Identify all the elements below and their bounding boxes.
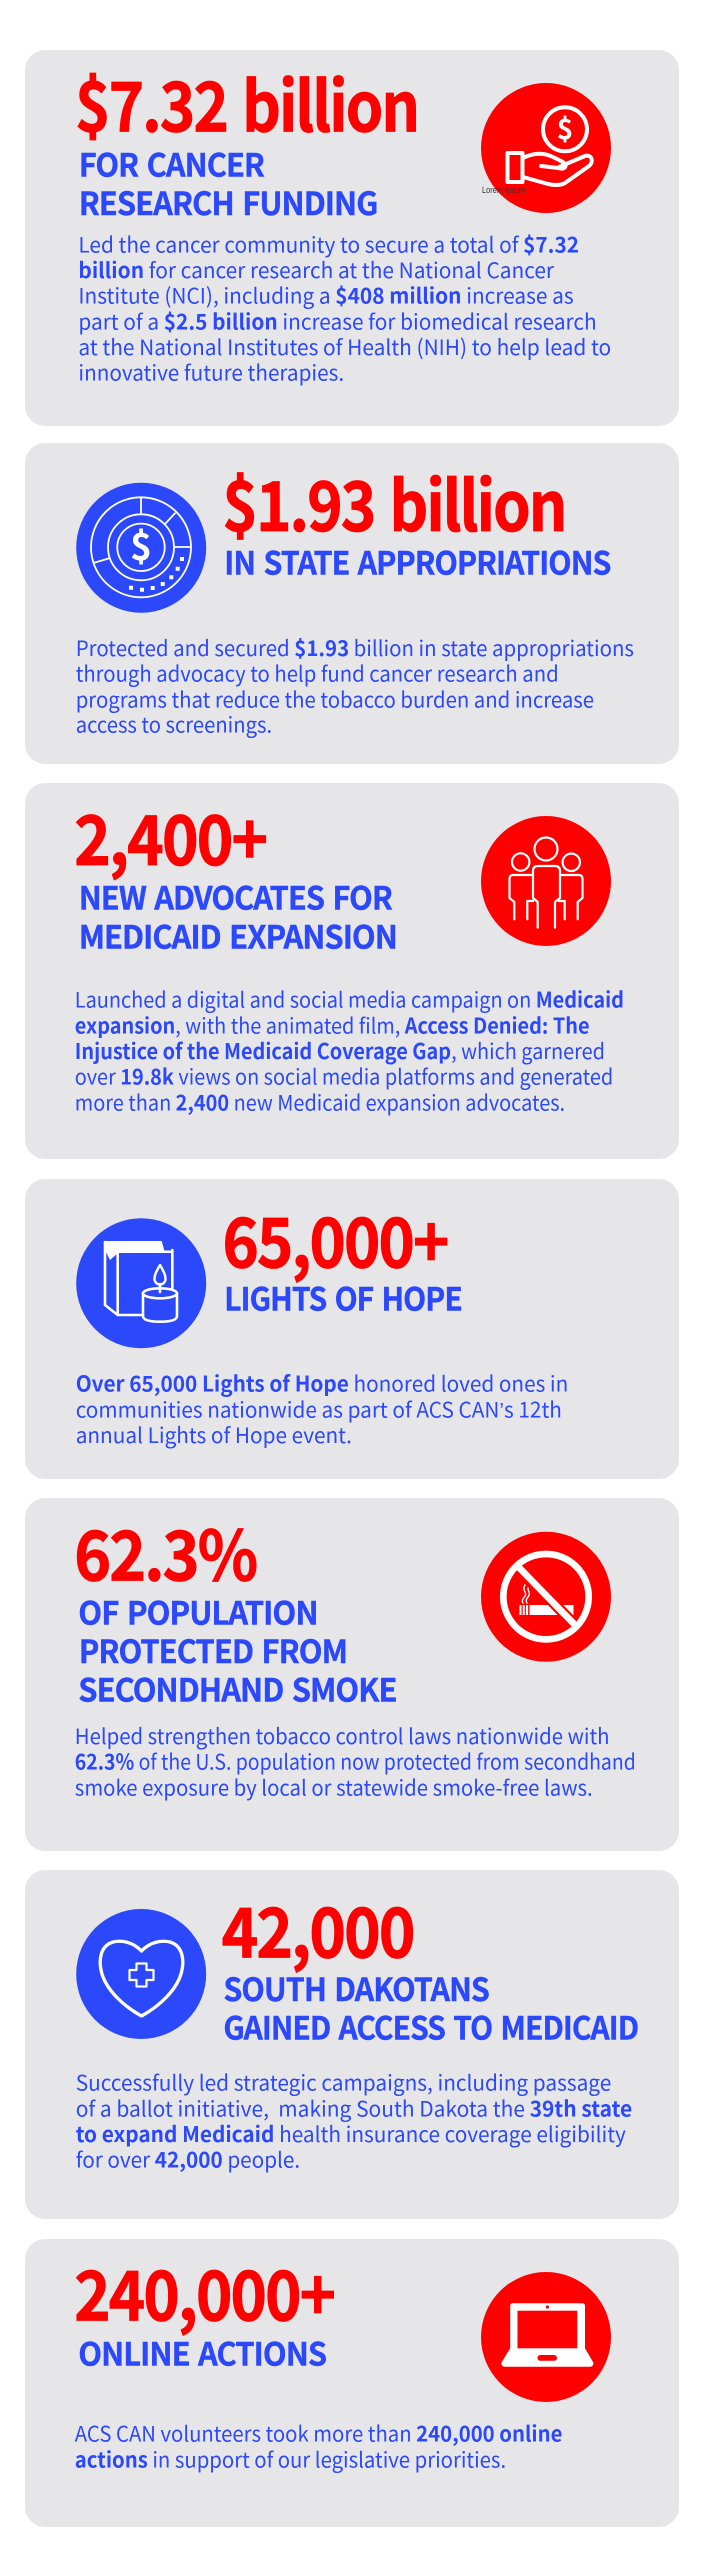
subheading: South Dakotans gained access to Medicaid <box>223 1965 638 2050</box>
body text <box>76 632 634 740</box>
panel: protected from secondhand smoke <box>25 1498 679 1851</box>
body text: expansion, with the animated film, Access Denied: The <box>75 1009 590 1040</box>
icon: group of people <box>481 816 611 946</box>
panel: cancer research funding <box>25 50 679 426</box>
subheading: for cancer research funding: FOR CANCER <box>79 141 265 187</box>
subheading: new advocates for Medicaid expansion: MEDICAID EXPANSION <box>79 912 397 958</box>
body text: smoke exposure by local or statewide smoke-free laws. <box>75 1771 593 1802</box>
heading: 42,000: 42,000 <box>222 1877 414 1977</box>
panel: new advocates for Medicaid expansion <box>25 783 679 1159</box>
subheading: of population protected from secondhand smoke: SECONDHAND SMOKE <box>78 1666 397 1712</box>
body text: billion for cancer research at the National Cancer <box>78 254 555 285</box>
body text <box>75 1720 636 1802</box>
body text: Helped strengthen tobacco control laws nationwide with <box>75 1720 610 1751</box>
subheading: of population protected from secondhand smoke <box>78 1589 397 1712</box>
body text: of a ballot initiative, making South Dakota the 39th state <box>76 2092 632 2123</box>
body text <box>75 2418 562 2474</box>
body text <box>75 984 624 1117</box>
body text <box>78 228 611 388</box>
panel: online actions <box>25 2239 679 2527</box>
body text: part of a $2.5 billion increase for biomedical research <box>78 305 597 336</box>
icon: heart with cross <box>76 1909 206 2039</box>
body text: Protected and secured $1.93 billion in state appropriations <box>76 632 634 663</box>
body text: at the National Institutes of Health (NIH) to help lead to <box>78 331 611 362</box>
icon: hand holding coin <box>481 83 611 213</box>
body text: ACS CAN volunteers took more than 240,000 online <box>75 2418 562 2449</box>
body text: Over 65,000 Lights of Hope honored loved ones in <box>76 1368 568 1399</box>
body text: Injustice of the Medicaid Coverage Gap, which garnered <box>75 1035 605 1066</box>
body text: actions in support of our legislative priorities. <box>75 2443 506 2474</box>
body text: through advocacy to help fund cancer research and <box>76 658 559 689</box>
heading: 62.3%: 62.3% <box>74 1501 257 1601</box>
subheading: in state appropriations: IN STATE APPROPRIATIONS <box>224 538 611 584</box>
icon: no smoking <box>481 1532 611 1662</box>
body text: programs that reduce the tobacco burden and increase <box>76 683 594 714</box>
body text: Institute (NCI), including a $408 million increase as <box>78 280 574 311</box>
body text: Launched a digital and social media campaign on Medicaid <box>75 984 624 1015</box>
icon: hand holding coin: $ <box>557 108 573 148</box>
body text: for over 42,000 people. <box>76 2144 300 2175</box>
icon: laptop <box>481 2272 611 2402</box>
panel: state appropriations <box>25 443 679 764</box>
subheading: South Dakotans gained access to Medicaid: GAINED ACCESS TO MEDICAID <box>223 2004 638 2050</box>
heading: $1.93 billion: $1.93 billion <box>222 451 565 551</box>
subheading: new advocates for Medicaid expansion: NEW ADVOCATES FOR <box>79 873 393 919</box>
body text: innovative future therapies. <box>78 357 344 388</box>
heading: $7.32 billion: $7.32 billion <box>75 52 418 152</box>
subheading: South Dakotans gained access to Medicaid: SOUTH DAKOTANS <box>223 1965 489 2011</box>
panel: South Dakotans gained access to Medicaid <box>25 1870 679 2219</box>
body text: over 19.8k views on social media platforms and generated <box>75 1061 613 1092</box>
body text: communities nationwide as part of ACS CAN’s 12th <box>76 1393 562 1424</box>
subheading: lights of hope: LIGHTS OF HOPE <box>224 1274 462 1320</box>
icon: hand holding coin: Lorem Ipsum <box>482 185 525 195</box>
body text: more than 2,400 new Medicaid expansion advocates. <box>75 1086 565 1117</box>
heading: 65,000+: 65,000+ <box>222 1187 448 1287</box>
heading: 240,000+: 240,000+ <box>74 2241 335 2341</box>
body text: Successfully led strategic campaigns, including passage <box>76 2067 611 2098</box>
body text: Led the cancer community to secure a total of $7.32 <box>78 228 579 259</box>
subheading: of population protected from secondhand smoke: OF POPULATION <box>78 1589 318 1635</box>
subheading: of population protected from secondhand smoke: PROTECTED FROM <box>79 1627 347 1673</box>
subheading: for cancer research funding: RESEARCH FUNDING <box>79 179 377 225</box>
heading: 2,400+: 2,400+ <box>74 785 267 885</box>
subheading: new advocates for Medicaid expansion <box>79 873 397 958</box>
icon: dollar dial: $ <box>130 517 152 571</box>
icon: luminaria bag and candle <box>76 1218 206 1348</box>
subheading: online actions: ONLINE ACTIONS <box>78 2329 326 2375</box>
body text: 62.3% of the U.S. population now protected from secondhand <box>75 1746 636 1777</box>
body text: to expand Medicaid health insurance coverage eligibility <box>76 2118 626 2149</box>
icon: dollar dial <box>76 483 206 613</box>
body text: annual Lights of Hope event. <box>76 1419 352 1450</box>
body text <box>76 1368 568 1450</box>
body text <box>76 2067 632 2175</box>
subheading: for cancer research funding <box>79 141 377 225</box>
body text: access to screenings. <box>76 709 272 740</box>
panel: lights of hope <box>25 1179 679 1479</box>
